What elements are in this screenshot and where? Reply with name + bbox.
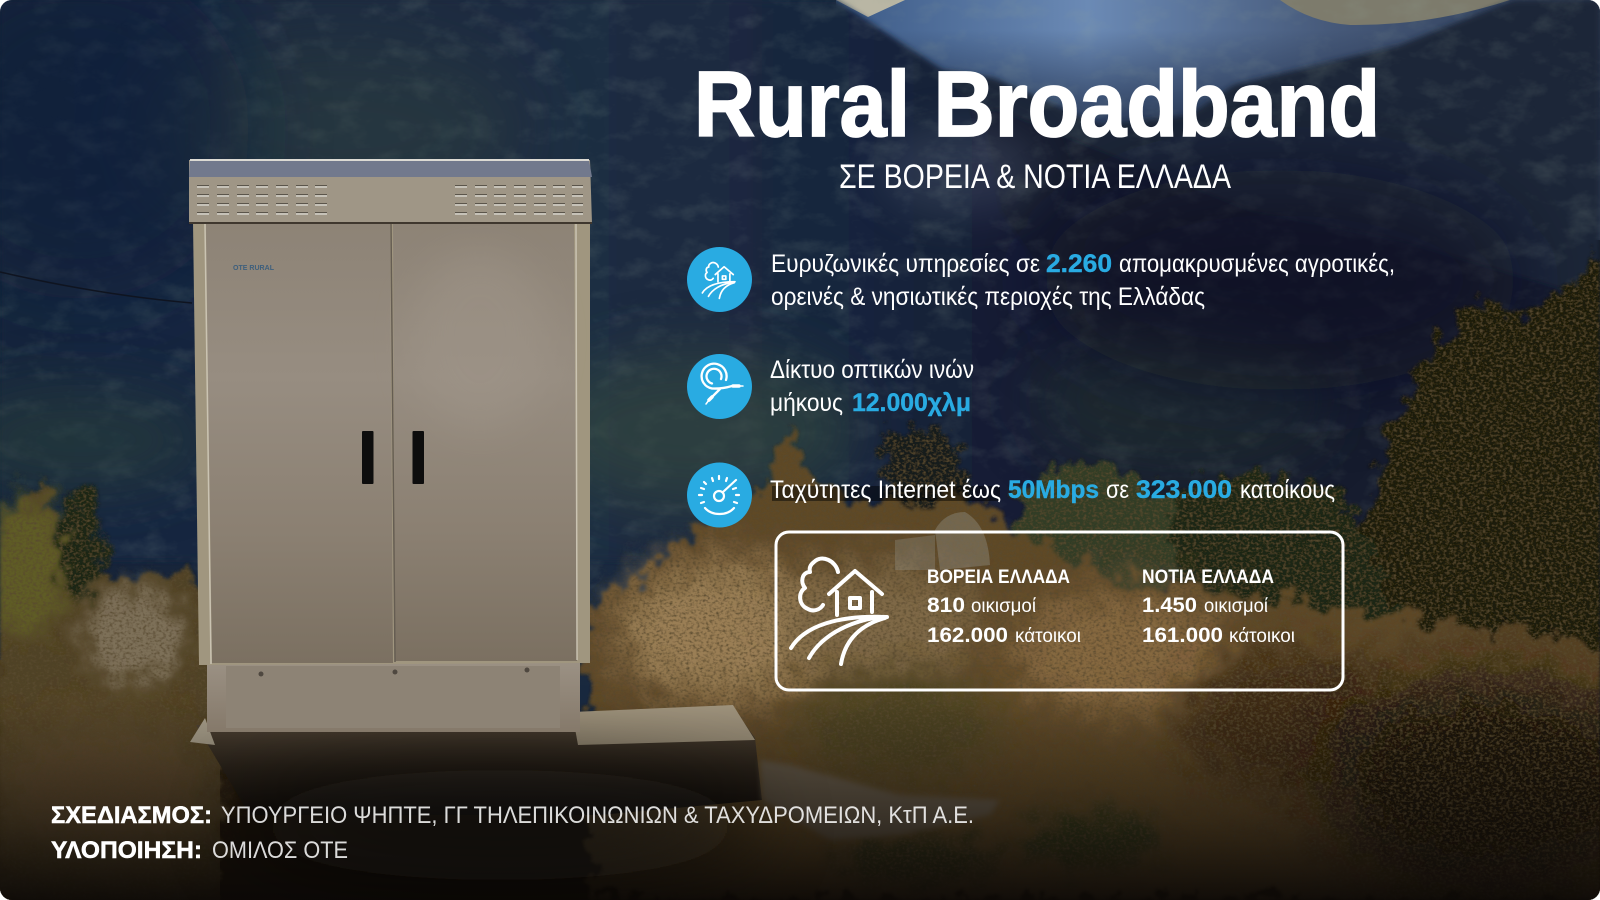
- text: internet speeds: [770, 476, 1335, 504]
- text: fibre network: 12.000χλμ: [852, 389, 971, 417]
- footer credits: ΣΧΕΔΙΑΣΜΟΣ:: [51, 802, 212, 829]
- text: fibre network: [770, 356, 974, 417]
- roadside cabinet: [189, 160, 592, 732]
- icon: rural house: [687, 247, 752, 312]
- subtitle: ΣΕ ΒΟΡΕΙΑ & ΝΟΤΙΑ ΕΛΛΑΔΑ: [839, 158, 1231, 196]
- text: settlements: 2.260: [1046, 250, 1112, 278]
- title: Rural Broadband: [694, 52, 1380, 156]
- louvers left: [197, 186, 327, 214]
- text: internet speeds: 323.000: [1136, 476, 1232, 504]
- south Greece figures: 161.000: [1142, 624, 1223, 647]
- footer credits: ΥΛΟΠΟΙΗΣΗ:: [51, 837, 202, 864]
- icon: house with road: [791, 559, 887, 664]
- icon: speed gauge: [687, 462, 752, 528]
- door handles: [362, 431, 424, 484]
- power line: [0, 272, 192, 303]
- text: internet speeds: 50Mbps: [1008, 476, 1099, 504]
- text: settlements: απομακρυσμένες αγροτικές,: [1119, 250, 1395, 278]
- gravel path: [760, 760, 1000, 840]
- north Greece figures: 810: [927, 594, 965, 617]
- text: fibre network: Δίκτυο οπτικών ινών: [770, 356, 974, 384]
- panel: north and south figures: [776, 532, 1343, 690]
- footer credits: ΥΠΟΥΡΓΕΙΟ ΨΗΠΤΕ, ΓΓ ΤΗΛΕΠΙΚΟΙΝΩΝΙΩΝ & ΤΑΧΥΔΡΟΜΕΙΩΝ, ΚτΠ Α.Ε.: [221, 802, 974, 829]
- north Greece figures: κάτοικοι: [1015, 626, 1081, 647]
- north Greece figures: [927, 567, 1081, 647]
- text: fibre network: μήκους: [770, 389, 843, 417]
- north Greece figures: οικισμοί: [971, 596, 1037, 617]
- footer credits: [51, 802, 974, 864]
- text highlight strip: [772, 486, 1000, 501]
- north Greece figures: 162.000: [927, 624, 1008, 647]
- north Greece figures: ΒΟΡΕΙΑ ΕΛΛΑΔΑ: [927, 567, 1070, 588]
- south Greece figures: 1.450: [1142, 594, 1197, 617]
- south Greece figures: οικισμοί: [1204, 596, 1269, 617]
- text: settlements: Ευρυζωνικές υπηρεσίες σε: [771, 250, 1040, 278]
- south Greece figures: [1142, 567, 1295, 647]
- text: internet speeds: Ταχύτητες Internet έως: [770, 476, 1001, 504]
- cabinet brand label: OTE RURAL: [233, 265, 275, 272]
- louvers right: [455, 186, 583, 214]
- bottom shade: [0, 700, 1600, 900]
- south Greece figures: κάτοικοι: [1229, 626, 1295, 647]
- text: settlements: [771, 250, 1395, 311]
- footer credits: ΟΜΙΛΟΣ ΟΤΕ: [212, 837, 348, 864]
- satellite dish behind the grass: [895, 512, 990, 570]
- icon: fibre cable: [687, 354, 752, 419]
- text: internet speeds: σε: [1106, 476, 1129, 504]
- text: internet speeds: κατοίκους: [1240, 476, 1335, 504]
- concrete slab under cabinet: [190, 705, 762, 815]
- text: settlements: ορεινές & νησιωτικές περιοχές της Ελλάδας: [771, 283, 1205, 311]
- south Greece figures: ΝΟΤΙΑ ΕΛΛΑΔΑ: [1142, 567, 1274, 588]
